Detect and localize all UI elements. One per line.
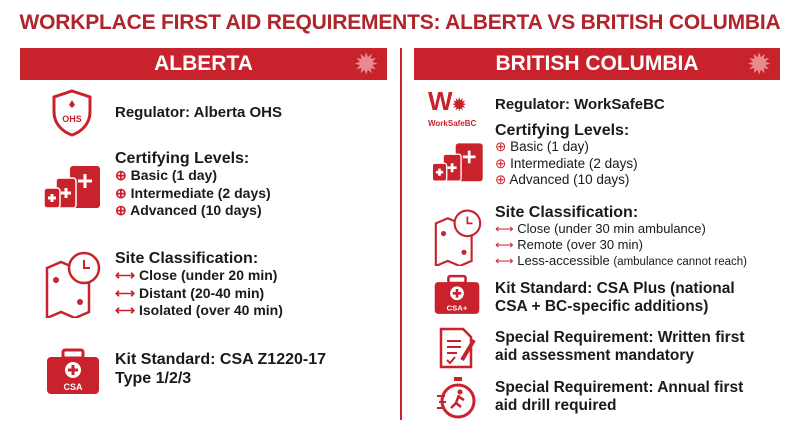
icon: CSA kit AB: CSA [63,382,83,392]
icon: CSA kit AB [47,348,99,394]
icon: OHS shield: OHS [62,114,82,124]
icon: map BC [434,210,482,266]
text: BC site classification: Site Classification: [495,204,638,221]
title: WORKPLACE FIRST AID REQUIREMENTS: ALBERTA VS BRITISH COLUMBIA [20,11,780,34]
icon: kits AB [44,166,100,208]
text: BC special 2: aid drill required [495,397,616,414]
icon: drill stopwatch [437,377,476,418]
header: British Columbia: ✹ [748,49,770,79]
text: AB certifying: ⊕ Basic (1 day) [115,167,217,183]
text: BC kit: Kit Standard: CSA Plus (national [495,280,735,297]
text: BC regulator: Regulator: WorkSafeBC [495,96,665,113]
icon: WorkSafeBC logo: WorkSafeBC [428,119,476,128]
text: BC special 1 [495,329,744,364]
text: BC certifying: ⊕ Basic (1 day) [495,139,589,154]
text: BC special 1: Special Requirement: Written first [495,329,744,346]
icon: map AB [46,252,100,318]
text: AB regulator: Regulator: Alberta OHS [115,104,282,121]
text: AB certifying: ⊕ Advanced (10 days) [115,202,262,218]
text: BC special 2: Special Requirement: Annual first [495,379,743,396]
text: AB site classification: ⟷ Distant (20-40 min) [115,284,264,300]
text: AB kit: Kit Standard: CSA Z1220-17 [115,351,326,368]
text: BC kit [495,280,735,315]
header: British Columbia: BRITISH COLUMBIA [496,52,698,75]
text: AB certifying: Certifying Levels: [115,150,249,167]
text: BC special 1: aid assessment mandatory [495,347,694,364]
text: AB kit: Type 1/2/3 [115,370,191,387]
text: AB certifying [115,150,271,218]
icon: WorkSafeBC logo: W✹ [428,86,466,116]
text: AB site classification [115,250,283,318]
text: BC certifying: ⊕ Advanced (10 days) [495,172,629,187]
text: BC kit: CSA + BC-specific additions) [495,298,708,315]
text: BC site classification: ⟷ Less-accessible (ambulance cannot reach) [495,253,747,268]
text: AB site classification: ⟷ Close (under 20 min) [115,267,277,283]
text: BC site classification: ⟷ Close (under 30 min ambulance) [495,221,706,236]
icon: written assessment [440,328,476,368]
header: British Columbia [414,48,780,80]
header: Alberta [20,48,387,80]
header: Alberta: ✹ [355,49,377,79]
text: BC site classification: ⟷ Remote (over 30 min) [495,237,643,252]
header: Alberta: ALBERTA [154,52,253,75]
text: AB kit [115,351,326,387]
icon: WorkSafeBC logo [428,86,476,128]
text: BC site classification [495,204,747,268]
text: BC certifying [495,122,638,187]
icon: CSA+ kit: CSA+ [447,303,468,312]
text: AB site classification: Site Classification: [115,250,258,267]
text: BC certifying: Certifying Levels: [495,122,629,139]
text: AB site classification: ⟷ Isolated (over 40 min) [115,302,283,318]
text: AB certifying: ⊕ Intermediate (2 days) [115,184,271,200]
icon: kits BC [432,143,483,182]
text: BC certifying: ⊕ Intermediate (2 days) [495,156,638,170]
text: BC special 2 [495,379,744,414]
icon: CSA+ kit [434,274,480,314]
icon: OHS shield [52,89,92,137]
